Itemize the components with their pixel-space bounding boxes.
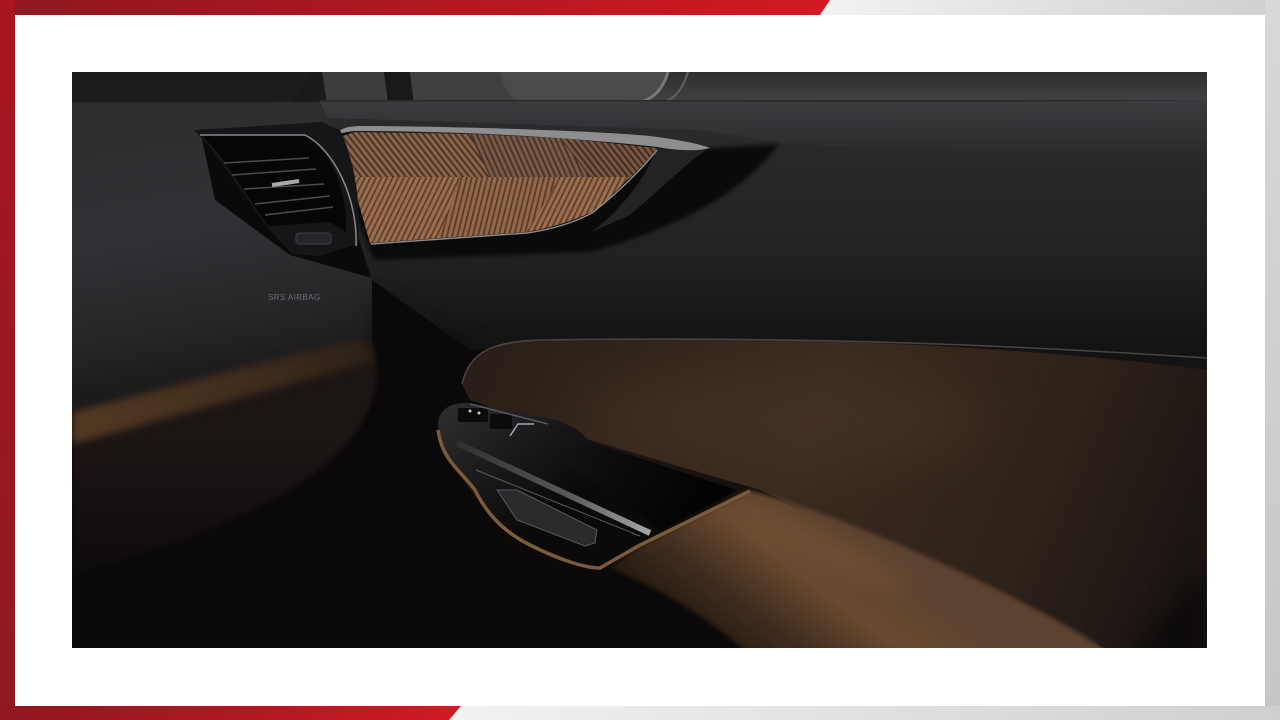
armrest highlight	[770, 520, 893, 582]
panel top band	[320, 100, 1207, 136]
lower silver edge of wood	[371, 150, 657, 244]
frame: left red bar	[0, 0, 15, 720]
frame: top bar	[0, 0, 1280, 15]
photo base	[72, 138, 1110, 648]
dark shade around the door gap	[378, 300, 470, 660]
handle thin line	[476, 470, 640, 536]
tan dashboard strip	[72, 339, 372, 444]
metal trim around wood	[331, 126, 710, 150]
vent slats	[224, 158, 333, 215]
lower dashboard dark panel	[72, 344, 378, 516]
wood trim recess shadow	[340, 130, 779, 260]
dashboard left panel	[72, 102, 372, 412]
dashboard badge: SRS AIRBAG	[268, 293, 320, 302]
door release lever	[497, 490, 597, 546]
frame: right grey bar	[1265, 0, 1280, 720]
upper door panel	[320, 100, 1207, 372]
window area at the top	[72, 72, 1207, 102]
tan armrest	[610, 491, 1115, 655]
tan piping along handle	[438, 430, 750, 568]
wood inlay panel	[333, 132, 657, 243]
vent chrome knob	[272, 181, 299, 185]
handle silver band	[457, 443, 650, 533]
vent control	[296, 233, 331, 244]
door fabric insert	[462, 339, 1207, 648]
wood trim grey wedge	[592, 147, 710, 232]
pull-cup recess	[562, 442, 736, 530]
window switches	[458, 404, 548, 436]
insert warm glow	[588, 390, 932, 488]
air vent	[194, 122, 359, 256]
frame: bottom bar	[0, 706, 1280, 720]
door handle unit	[438, 403, 750, 568]
dark right corner	[1144, 583, 1207, 648]
vent chrome top line	[200, 135, 356, 246]
photo: car door interior	[72, 72, 1207, 660]
insert top seam	[462, 339, 1207, 384]
